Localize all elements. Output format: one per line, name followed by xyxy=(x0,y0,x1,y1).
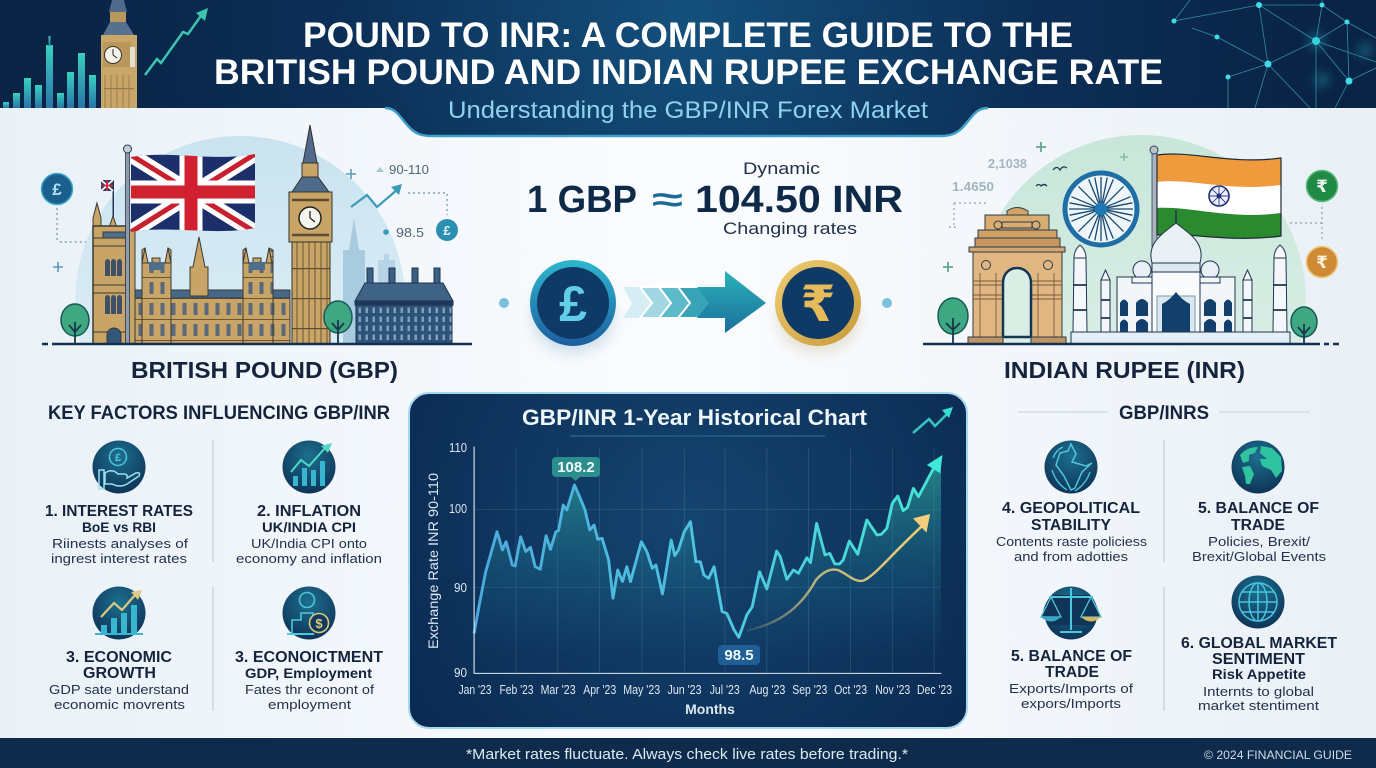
rate equation: ≈ xyxy=(652,181,683,219)
panel: historical chart xyxy=(409,393,967,728)
dotted connectors xyxy=(949,203,1322,242)
heading: Indian rupee: INDIAN RUPEE (INR) xyxy=(1004,357,1245,383)
rate equation: 1 GBP xyxy=(527,179,637,221)
x axis labels: Oct '23 xyxy=(834,683,867,697)
rate labels: 1.4650 xyxy=(952,179,994,194)
callout: low value xyxy=(718,645,760,665)
x axis labels: Aug '23 xyxy=(749,683,785,697)
factor 5: Brexit/Global Events xyxy=(1192,549,1327,564)
factor 6: SENTIMENT xyxy=(1212,651,1305,668)
factor 1: Riinests analyses of xyxy=(52,536,188,551)
factor 5 second: TRADE xyxy=(1045,664,1099,681)
icon: title trend arrow xyxy=(913,407,953,433)
y axis labels: 90 xyxy=(454,580,467,595)
factor 6: Internts to global xyxy=(1203,684,1314,699)
x axis labels xyxy=(458,683,952,697)
icon: inflation chart xyxy=(282,440,336,494)
icon: small Union flag on tower xyxy=(101,180,114,220)
factor 4: 4. GEOPOLITICAL xyxy=(1002,500,1140,517)
dotted connector left xyxy=(57,208,86,242)
panel: British pound illustration xyxy=(40,124,472,346)
factor 3 xyxy=(49,649,189,712)
line chart xyxy=(474,447,942,673)
icon: pound coin right: £ xyxy=(443,223,451,238)
heading: British pound: BRITISH POUND (GBP) xyxy=(131,357,398,383)
copyright: © 2024 FINANCIAL GUIDE xyxy=(1204,750,1352,762)
factor 4: Contents raste policiess xyxy=(996,534,1148,549)
icon: distant skyline xyxy=(343,218,395,344)
factor 4 xyxy=(996,500,1148,564)
icon: rupee coin orange xyxy=(1306,246,1338,278)
factor 4: employment xyxy=(268,697,351,712)
label: dynamic: Dynamic xyxy=(743,159,821,178)
factor 6 xyxy=(1181,635,1337,713)
disclaimer: *Market rates fluctuate. Always check live rates before trading.* xyxy=(466,746,908,763)
value label xyxy=(383,225,424,240)
icon: plus marks xyxy=(53,169,356,272)
icon: grid globe xyxy=(1232,576,1284,628)
icon: flagpole xyxy=(124,145,132,344)
x axis labels: Dec '23 xyxy=(917,683,952,697)
x axis labels: Jan '23 xyxy=(458,683,492,697)
icon: mini trend line xyxy=(351,184,402,207)
icon: conversion arrow xyxy=(623,271,766,333)
icon: earth globe xyxy=(1232,440,1284,494)
factor 5: TRADE xyxy=(1231,517,1285,534)
factor 6: 6. GLOBAL MARKET xyxy=(1181,635,1337,652)
x axis labels: Jun '23 xyxy=(668,683,702,697)
icon: pound coin right xyxy=(436,219,458,241)
x axis title: Months xyxy=(685,701,735,717)
rate equation xyxy=(527,179,903,221)
factor 5: Policies, Brexit/ xyxy=(1208,534,1310,549)
factor 6: Risk Appetite xyxy=(1212,667,1307,682)
x axis labels: Nov '23 xyxy=(875,683,910,697)
label: changing rates: Changing rates xyxy=(723,219,857,238)
icon: Victoria Tower xyxy=(93,203,135,344)
icon: interest rates hand and coin xyxy=(92,440,146,494)
panel: key factors left xyxy=(45,403,390,712)
x axis labels: Jul '23 xyxy=(710,683,740,697)
icon: Houses of Parliament xyxy=(135,237,290,344)
x axis labels: May '23 xyxy=(623,683,660,697)
footer bar xyxy=(0,738,1376,768)
icon: tree left xyxy=(61,304,89,344)
ground line xyxy=(42,343,472,345)
x axis labels: Sep '23 xyxy=(792,683,827,697)
rate labels: 2,1038 xyxy=(988,156,1027,171)
factor 2: UK/INDIA CPI xyxy=(262,520,356,535)
icon: tree right xyxy=(1291,307,1317,344)
icon: employment: $ xyxy=(315,616,323,631)
value label: 98.5 xyxy=(396,225,424,240)
y axis labels: 110 xyxy=(449,440,467,455)
dot right xyxy=(882,298,892,308)
icon: network graphic xyxy=(1172,0,1376,108)
subtitle: Understanding the GBP/INR Forex Market xyxy=(448,97,928,124)
ground line xyxy=(923,343,1339,345)
factor 2: economy and inflation xyxy=(236,551,382,566)
icon: rupee coin: ₹ xyxy=(801,276,835,332)
factor 4: GDP, Employment xyxy=(245,666,373,681)
factor 3: 3. ECONOMIC xyxy=(66,649,172,666)
icon: rupee coin green: ₹ xyxy=(1316,177,1328,196)
icon: economic growth xyxy=(92,586,146,640)
factor 5 second: expors/Imports xyxy=(1021,696,1122,711)
icon: interest rates hand and coin: £ xyxy=(115,452,121,464)
callout: high value: 108.2 xyxy=(557,459,595,476)
range label: 90-110 xyxy=(389,162,429,177)
icon: Taj Mahal xyxy=(1071,210,1290,344)
icon: office building xyxy=(355,268,453,344)
icon: header trend arrow xyxy=(145,8,208,75)
title: POUND TO INR: A COMPLETE GUIDE TO THE xyxy=(303,16,1073,55)
icon: flagpole xyxy=(1150,146,1158,250)
factor 4: 3. ECONOICTMENT xyxy=(235,649,383,666)
x axis labels: Apr '23 xyxy=(583,683,616,697)
callout: low value: 98.5 xyxy=(724,647,754,664)
icon: Indian flag xyxy=(1157,154,1281,238)
title: BRITISH POUND AND INDIAN RUPEE EXCHANGE RATE xyxy=(214,53,1163,92)
title xyxy=(214,16,1163,92)
factor 4: STABILITY xyxy=(1031,517,1111,534)
icon: header Big Ben xyxy=(101,0,137,108)
factor 1: 1. INTEREST RATES xyxy=(45,503,193,520)
factor 5 second xyxy=(1009,648,1133,711)
factor 3: GROWTH xyxy=(83,665,156,682)
header banner xyxy=(0,0,1376,136)
icon: Big Ben xyxy=(289,125,332,344)
icon: rupee coin orange: ₹ xyxy=(1316,253,1328,272)
dot left xyxy=(499,298,509,308)
icon: pound coin xyxy=(530,260,616,354)
factor 5 second: 5. BALANCE OF xyxy=(1011,648,1132,665)
factor 5: 5. BALANCE OF xyxy=(1198,500,1319,517)
y axis labels: 100 xyxy=(449,501,467,516)
icon: pound coin: £ xyxy=(559,276,587,332)
icon: India Gate xyxy=(968,208,1066,344)
x axis labels: Feb '23 xyxy=(500,683,534,697)
rate labels xyxy=(952,156,1027,194)
dotted connector right xyxy=(408,193,447,215)
icon: balance scales xyxy=(1041,586,1101,640)
panel: key factors right xyxy=(996,403,1337,713)
heading: key factors: KEY FACTORS INFLUENCING GBP/INR xyxy=(48,403,390,424)
factor 5 xyxy=(1192,500,1327,564)
icon: rupee coin xyxy=(775,260,861,354)
icon: employment xyxy=(282,586,336,640)
rate equation: 104.50 INR xyxy=(695,179,903,221)
icon: Union Jack flag xyxy=(131,154,255,232)
x axis labels: Mar '23 xyxy=(541,683,576,697)
factor 2 xyxy=(236,503,382,566)
factor 1: BoE vs RBI xyxy=(82,520,156,535)
factor 5 second: Exports/Imports of xyxy=(1009,681,1133,696)
icon: rupee coin green xyxy=(1306,170,1338,202)
factor 4: and from adotties xyxy=(1014,549,1129,564)
panel: Indian rupee illustration xyxy=(923,135,1339,346)
chart title: GBP/INR 1-Year Historical Chart xyxy=(522,405,868,430)
y axis title: Exchange Rate INR 90-110 xyxy=(425,473,441,649)
icon: Ashoka chakra xyxy=(1065,173,1137,245)
y axis labels: 90 xyxy=(454,665,467,680)
factor 3: economic movrents xyxy=(54,697,186,712)
factor 3: GDP sate understand xyxy=(49,682,189,697)
factor 6: market stentiment xyxy=(1198,698,1319,713)
icon: geopolitical globe xyxy=(1044,440,1098,494)
factor 1 xyxy=(45,503,193,566)
panel: exchange rate xyxy=(499,159,903,354)
factor 2: 2. INFLATION xyxy=(257,503,361,520)
y axis labels xyxy=(449,440,467,680)
factor 4: Fates thr econont of xyxy=(245,682,374,697)
icon: header bar chart xyxy=(3,36,96,108)
icon: tree right xyxy=(324,301,352,344)
factor 1: ingrest interest rates xyxy=(51,551,188,566)
factor 2: UK/India CPI onto xyxy=(251,536,367,551)
icon: tree left xyxy=(938,298,968,344)
icon: plus marks and birds xyxy=(943,142,1128,272)
heading: GBP/INRS: GBP/INRS xyxy=(1119,403,1209,424)
icon: pound coin left: £ xyxy=(52,180,62,199)
callout: high value xyxy=(552,457,600,481)
icon: pound coin left xyxy=(42,174,72,204)
factor 4 xyxy=(235,649,383,712)
